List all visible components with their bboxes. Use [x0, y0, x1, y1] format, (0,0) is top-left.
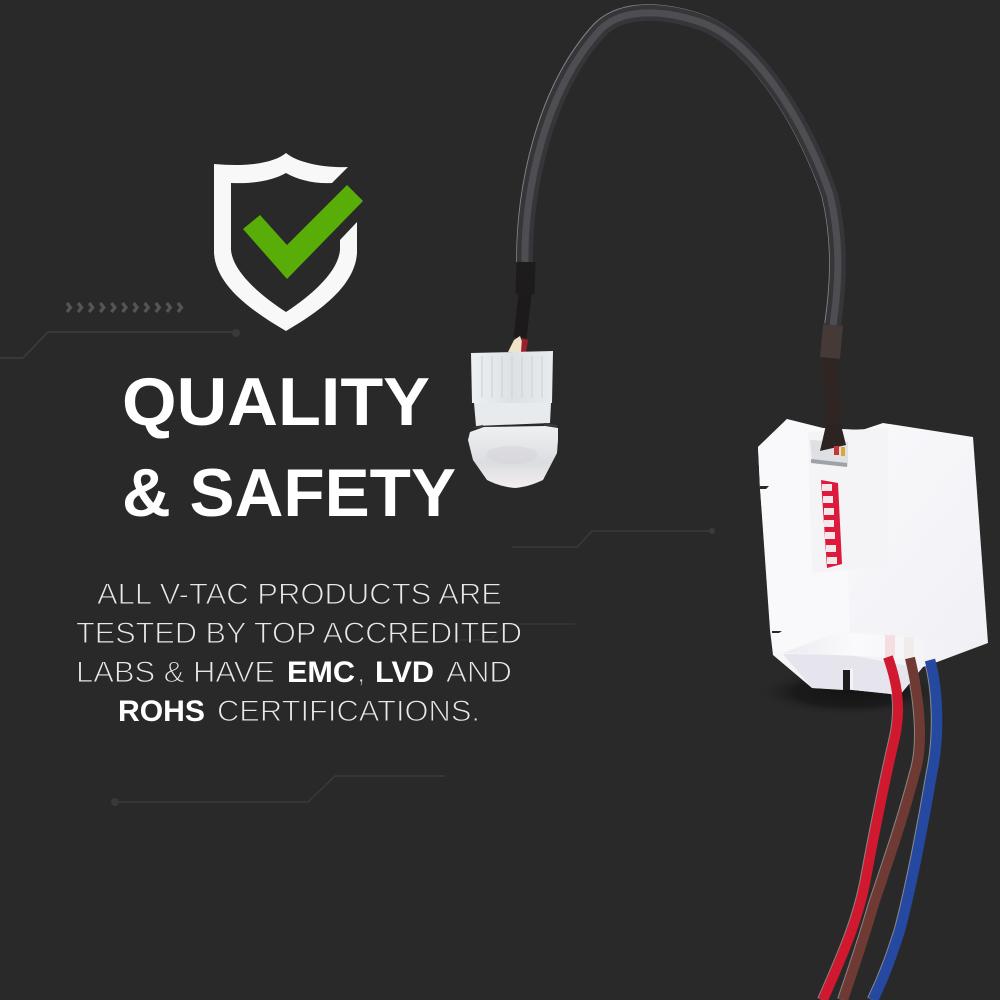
body text: ALL V-TAC PRODUCTS ARE: [97, 578, 502, 611]
body text: AND: [446, 656, 512, 689]
wires: [822, 657, 937, 1000]
cable: [520, 12, 838, 338]
circuit line: behind text: [459, 624, 575, 640]
side face shade: [758, 419, 850, 652]
wire collars: [885, 635, 895, 657]
body text: ,: [357, 656, 365, 689]
raised panel: [808, 428, 888, 573]
body text: ROHS: [118, 695, 205, 728]
notch: [843, 670, 850, 690]
connector: [810, 440, 848, 466]
circuit line: upper left: [0, 329, 240, 358]
body text: EMC: [287, 656, 355, 689]
sensor head: [468, 336, 558, 488]
icon: shield with check mark: [214, 153, 363, 331]
left heat-shrink sleeve: [525, 262, 526, 294]
body text: LVD: [375, 656, 434, 689]
heading: QUALITY: [122, 364, 430, 440]
heading: [122, 364, 456, 531]
heading: & SAFETY: [122, 455, 456, 531]
product box: [758, 419, 988, 695]
DIP switch: [821, 480, 842, 568]
base tab: [783, 654, 918, 695]
body text: [76, 578, 522, 728]
body text: LABS & HAVE: [76, 656, 275, 689]
circuit line: lower: [111, 776, 445, 806]
body text: TESTED BY TOP ACCREDITED: [76, 617, 522, 650]
shadow beneath product box: [755, 668, 945, 716]
right heat-shrink sleeve and wire ends: [820, 325, 846, 456]
body text: CERTIFICATIONS.: [217, 695, 480, 728]
box body: [758, 419, 988, 695]
chevron row: [67, 303, 182, 312]
bottom lip: [783, 632, 987, 662]
circuit line: centre: [512, 528, 715, 547]
